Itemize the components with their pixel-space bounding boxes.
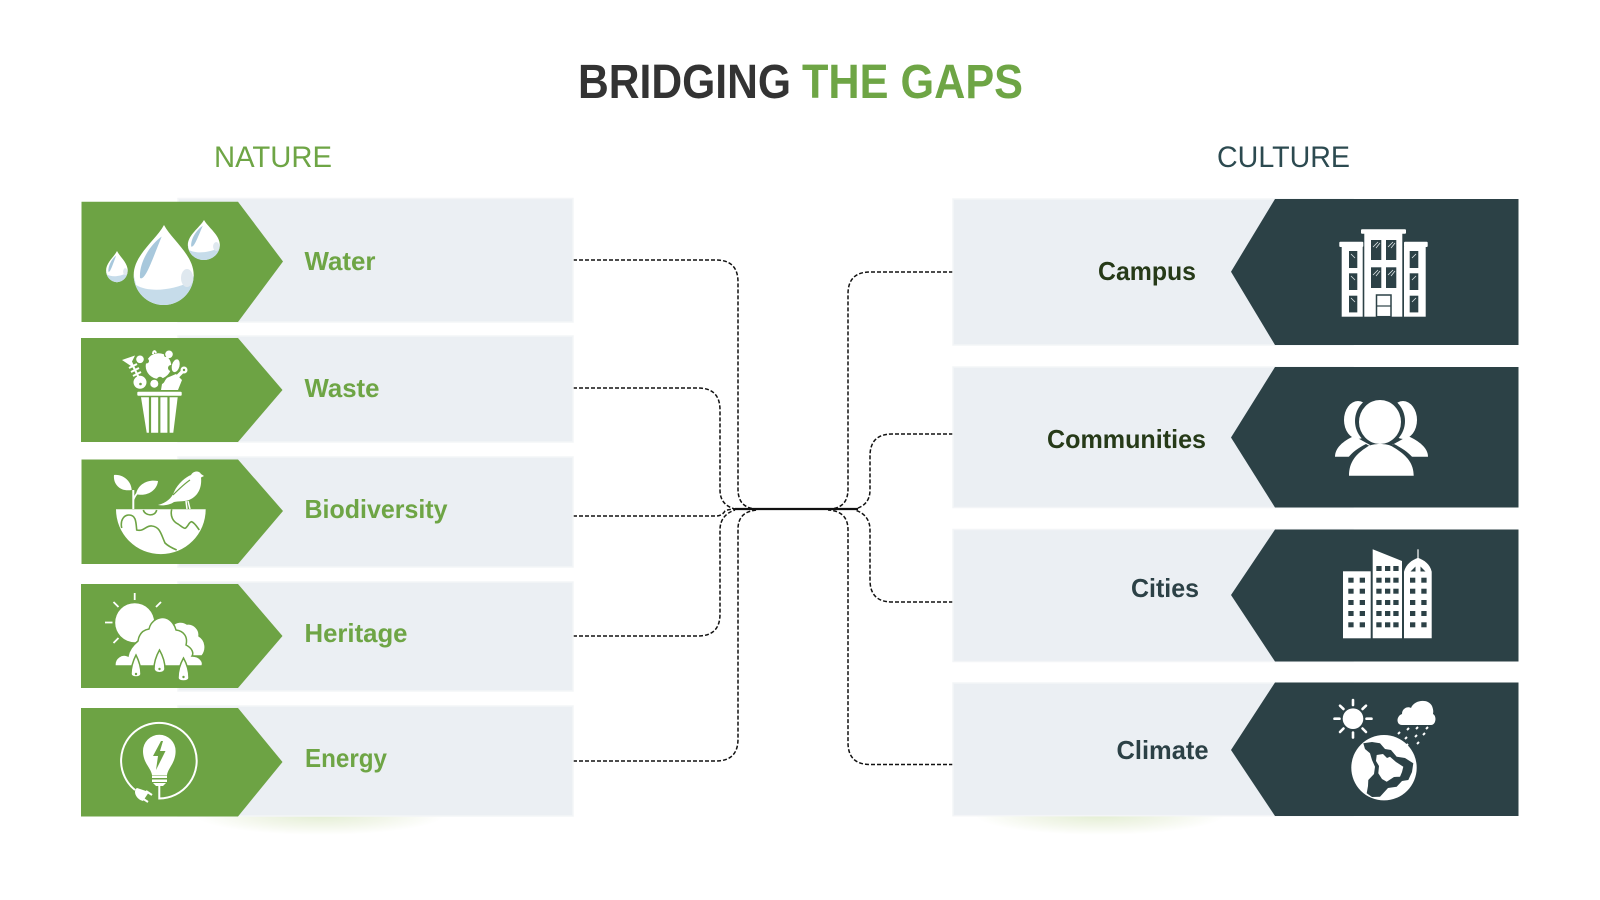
shadow: right column glow	[975, 795, 1225, 835]
heading: nature: NATURE	[214, 141, 332, 174]
label: communities: Communities	[1047, 424, 1206, 454]
icon: campus building	[1339, 229, 1428, 317]
icon: group of people	[1335, 396, 1428, 476]
label: campus: Campus	[1098, 256, 1196, 286]
panel: communities	[953, 367, 1518, 508]
panel: water	[82, 198, 573, 322]
heading: culture: CULTURE	[1217, 141, 1350, 174]
title: THE GAPS	[802, 56, 1023, 109]
title	[578, 56, 1023, 109]
label: climate: Climate	[1116, 735, 1208, 765]
icon: globe, sprout and bird	[114, 471, 206, 554]
panel: energy	[81, 706, 573, 816]
icon: city buildings	[1343, 549, 1432, 638]
label: biodiversity: Biodiversity	[304, 494, 448, 524]
connector lines	[573, 260, 953, 764]
panel: heritage	[81, 582, 573, 691]
panel: cities	[953, 530, 1518, 662]
icon: light bulb with plug	[121, 723, 197, 802]
label: waste: Waste	[304, 373, 380, 403]
shadow: left column glow	[195, 795, 445, 835]
title: BRIDGING	[578, 56, 791, 109]
icon: water drops	[106, 220, 220, 305]
panel: waste	[81, 336, 573, 442]
label: cities: Cities	[1131, 573, 1199, 603]
icon: sun, clouds and rain	[105, 593, 205, 681]
icon: sun, rain cloud and globe	[1334, 700, 1435, 800]
label: energy: Energy	[305, 743, 387, 773]
label: heritage: Heritage	[304, 618, 408, 648]
label: water: Water	[304, 246, 376, 276]
panel: biodiversity	[82, 457, 573, 567]
panel: climate	[953, 682, 1518, 816]
panel: campus	[953, 199, 1518, 345]
icon: waste basket	[122, 350, 188, 433]
